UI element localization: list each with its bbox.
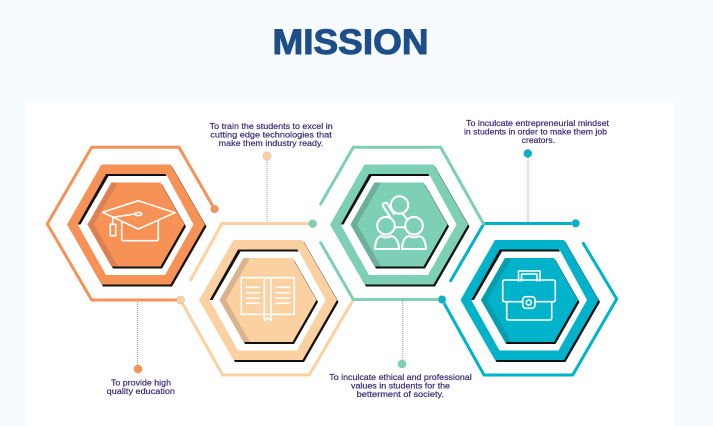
caption: ethical and professional values: values in students for the	[351, 380, 450, 390]
dot: caption 2 marker	[263, 152, 271, 160]
icon: open book	[241, 278, 294, 321]
caption: entrepreneurial mindset	[464, 118, 610, 145]
caption: high quality education	[107, 378, 175, 396]
dot: caption 4 marker	[524, 149, 532, 158]
outline: green hexagon	[321, 147, 483, 300]
hexagon: teal	[460, 240, 600, 362]
caption: cutting edge technologies: cutting edge technologies that	[210, 130, 332, 140]
caption: ethical and professional values: betterment of society.	[357, 389, 444, 399]
dotted connector: hexagon 1	[136, 302, 138, 366]
outline: peach hexagon	[180, 224, 353, 375]
caption: cutting edge technologies: To train the students to excel in	[210, 121, 333, 131]
dotted connector: hexagon 4	[527, 156, 529, 222]
dot: caption 1 marker	[134, 365, 142, 373]
icon: graduation cap	[103, 201, 175, 241]
caption: entrepreneurial mindset: in students in order to make them job	[464, 126, 607, 136]
dotted connector: hexagon 2	[266, 158, 268, 222]
icon: group of people	[375, 196, 426, 249]
icon: briefcase	[503, 271, 555, 320]
dot: peach line start	[176, 296, 184, 304]
caption: high quality education: To provide high	[111, 378, 171, 388]
caption: entrepreneurial mindset: To inculcate entrepreneurial mindset	[466, 118, 610, 128]
dot: orange line end	[210, 205, 218, 213]
caption: ethical and professional values	[329, 372, 472, 399]
caption: high quality education: quality education	[107, 386, 175, 396]
caption: cutting edge technologies	[210, 121, 333, 148]
dotted connector: hexagon 3	[402, 301, 404, 361]
dot: green line start	[309, 220, 317, 228]
title: MISSION	[272, 23, 428, 62]
caption: entrepreneurial mindset: creators.	[522, 135, 555, 145]
caption: cutting edge technologies: make them industry ready.	[219, 138, 323, 148]
hexagon: green	[330, 164, 470, 286]
dot: teal line end	[572, 219, 580, 227]
hexagon: peach	[199, 240, 338, 362]
dot: caption 3 marker	[398, 360, 406, 368]
caption: ethical and professional values: To inculcate ethical and professional	[329, 372, 472, 382]
outline: teal hexagon	[442, 224, 617, 375]
outline: orange hexagon	[47, 147, 214, 300]
hexagon: orange	[67, 164, 206, 286]
dot: teal line start	[438, 296, 446, 304]
